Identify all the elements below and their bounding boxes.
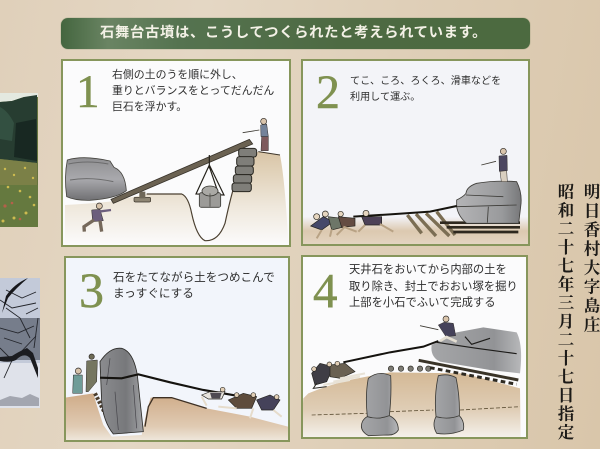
lever beam: [111, 139, 253, 203]
sledge track: [440, 223, 520, 232]
step 3 text: [113, 271, 275, 300]
title banner: [61, 18, 530, 49]
photo: forest and flower field: [0, 93, 38, 227]
fulcrum: [134, 192, 151, 202]
panel 3: standing the stone upright: [64, 256, 290, 442]
right standing stone: [434, 375, 464, 434]
overseer on the stone: [481, 148, 507, 182]
pulling workers: [311, 210, 393, 238]
illustration: lever and boulder: [65, 118, 288, 242]
packed soil beside the stone: [95, 393, 107, 417]
step number 4: 4: [313, 263, 338, 318]
pulling workers: [312, 361, 365, 388]
haul rope: [353, 206, 457, 217]
crouching figure: [84, 203, 111, 232]
rope: [100, 374, 237, 396]
step 2 text: [350, 75, 501, 103]
row of small roller stones: [388, 366, 431, 371]
step number 1: 1: [76, 66, 100, 118]
boulder: [65, 158, 126, 200]
step number 2: 2: [316, 66, 340, 119]
illustration: hauling the boulder: [303, 148, 528, 244]
boulder on sledge: [457, 181, 521, 223]
step 3 text: まっすぐにする: [113, 287, 194, 300]
step 2 text: てこ、ころ、ろくろ、滑車などを: [350, 76, 501, 87]
figure on the hill: [243, 118, 268, 151]
step 3 text: 石をたてながら土をつめこんで: [113, 271, 275, 284]
title banner: 石舞台古墳は、こうしてつくられたと考えられています。: [100, 25, 487, 41]
stacked sandbag wall: [232, 148, 257, 192]
step number 3: 3: [79, 262, 104, 318]
step 4 text: 上部を小石でふいて完成する: [349, 297, 496, 309]
photo: bare winter tree: [0, 278, 40, 408]
rollers on the ground: [407, 212, 455, 236]
step 1 text: 右側の土のうを順に外し、: [112, 69, 243, 81]
step 4 text: 天井石をおいてから内部の土を: [349, 264, 507, 276]
step 2 text: 利用して運ぶ。: [350, 92, 420, 103]
panel 4: placing the capstone and finishing: [301, 255, 528, 439]
step 1 text: 巨石を浮かす。: [112, 101, 187, 113]
workers pulling on the rope: [202, 387, 282, 418]
capstone: [431, 327, 521, 373]
panel 1: lifting the stone with a lever: [61, 59, 291, 247]
step 4 text: [349, 263, 518, 309]
illustration: raising the upright stone: [66, 348, 288, 440]
hanging stone basket: [196, 155, 224, 207]
rollers under the capstone: [419, 360, 518, 384]
step 1 text: [112, 68, 274, 113]
left standing stone: [361, 373, 398, 436]
step 1 text: 重りとバランスをとってだんだん: [112, 85, 274, 97]
upright stone: [100, 348, 143, 434]
illustration: capstone on standing stones: [303, 316, 522, 437]
panel 2: transporting the stone on rollers: [301, 59, 530, 246]
workers behind the stone: [73, 354, 97, 393]
rope: [343, 341, 438, 362]
overseer on the capstone: [420, 316, 457, 342]
step 4 text: 取り除き、封土でおおい塚を掘り: [349, 280, 518, 292]
vertical text: designation date: 昭和二十七年三月二十七日指定: [554, 183, 578, 442]
